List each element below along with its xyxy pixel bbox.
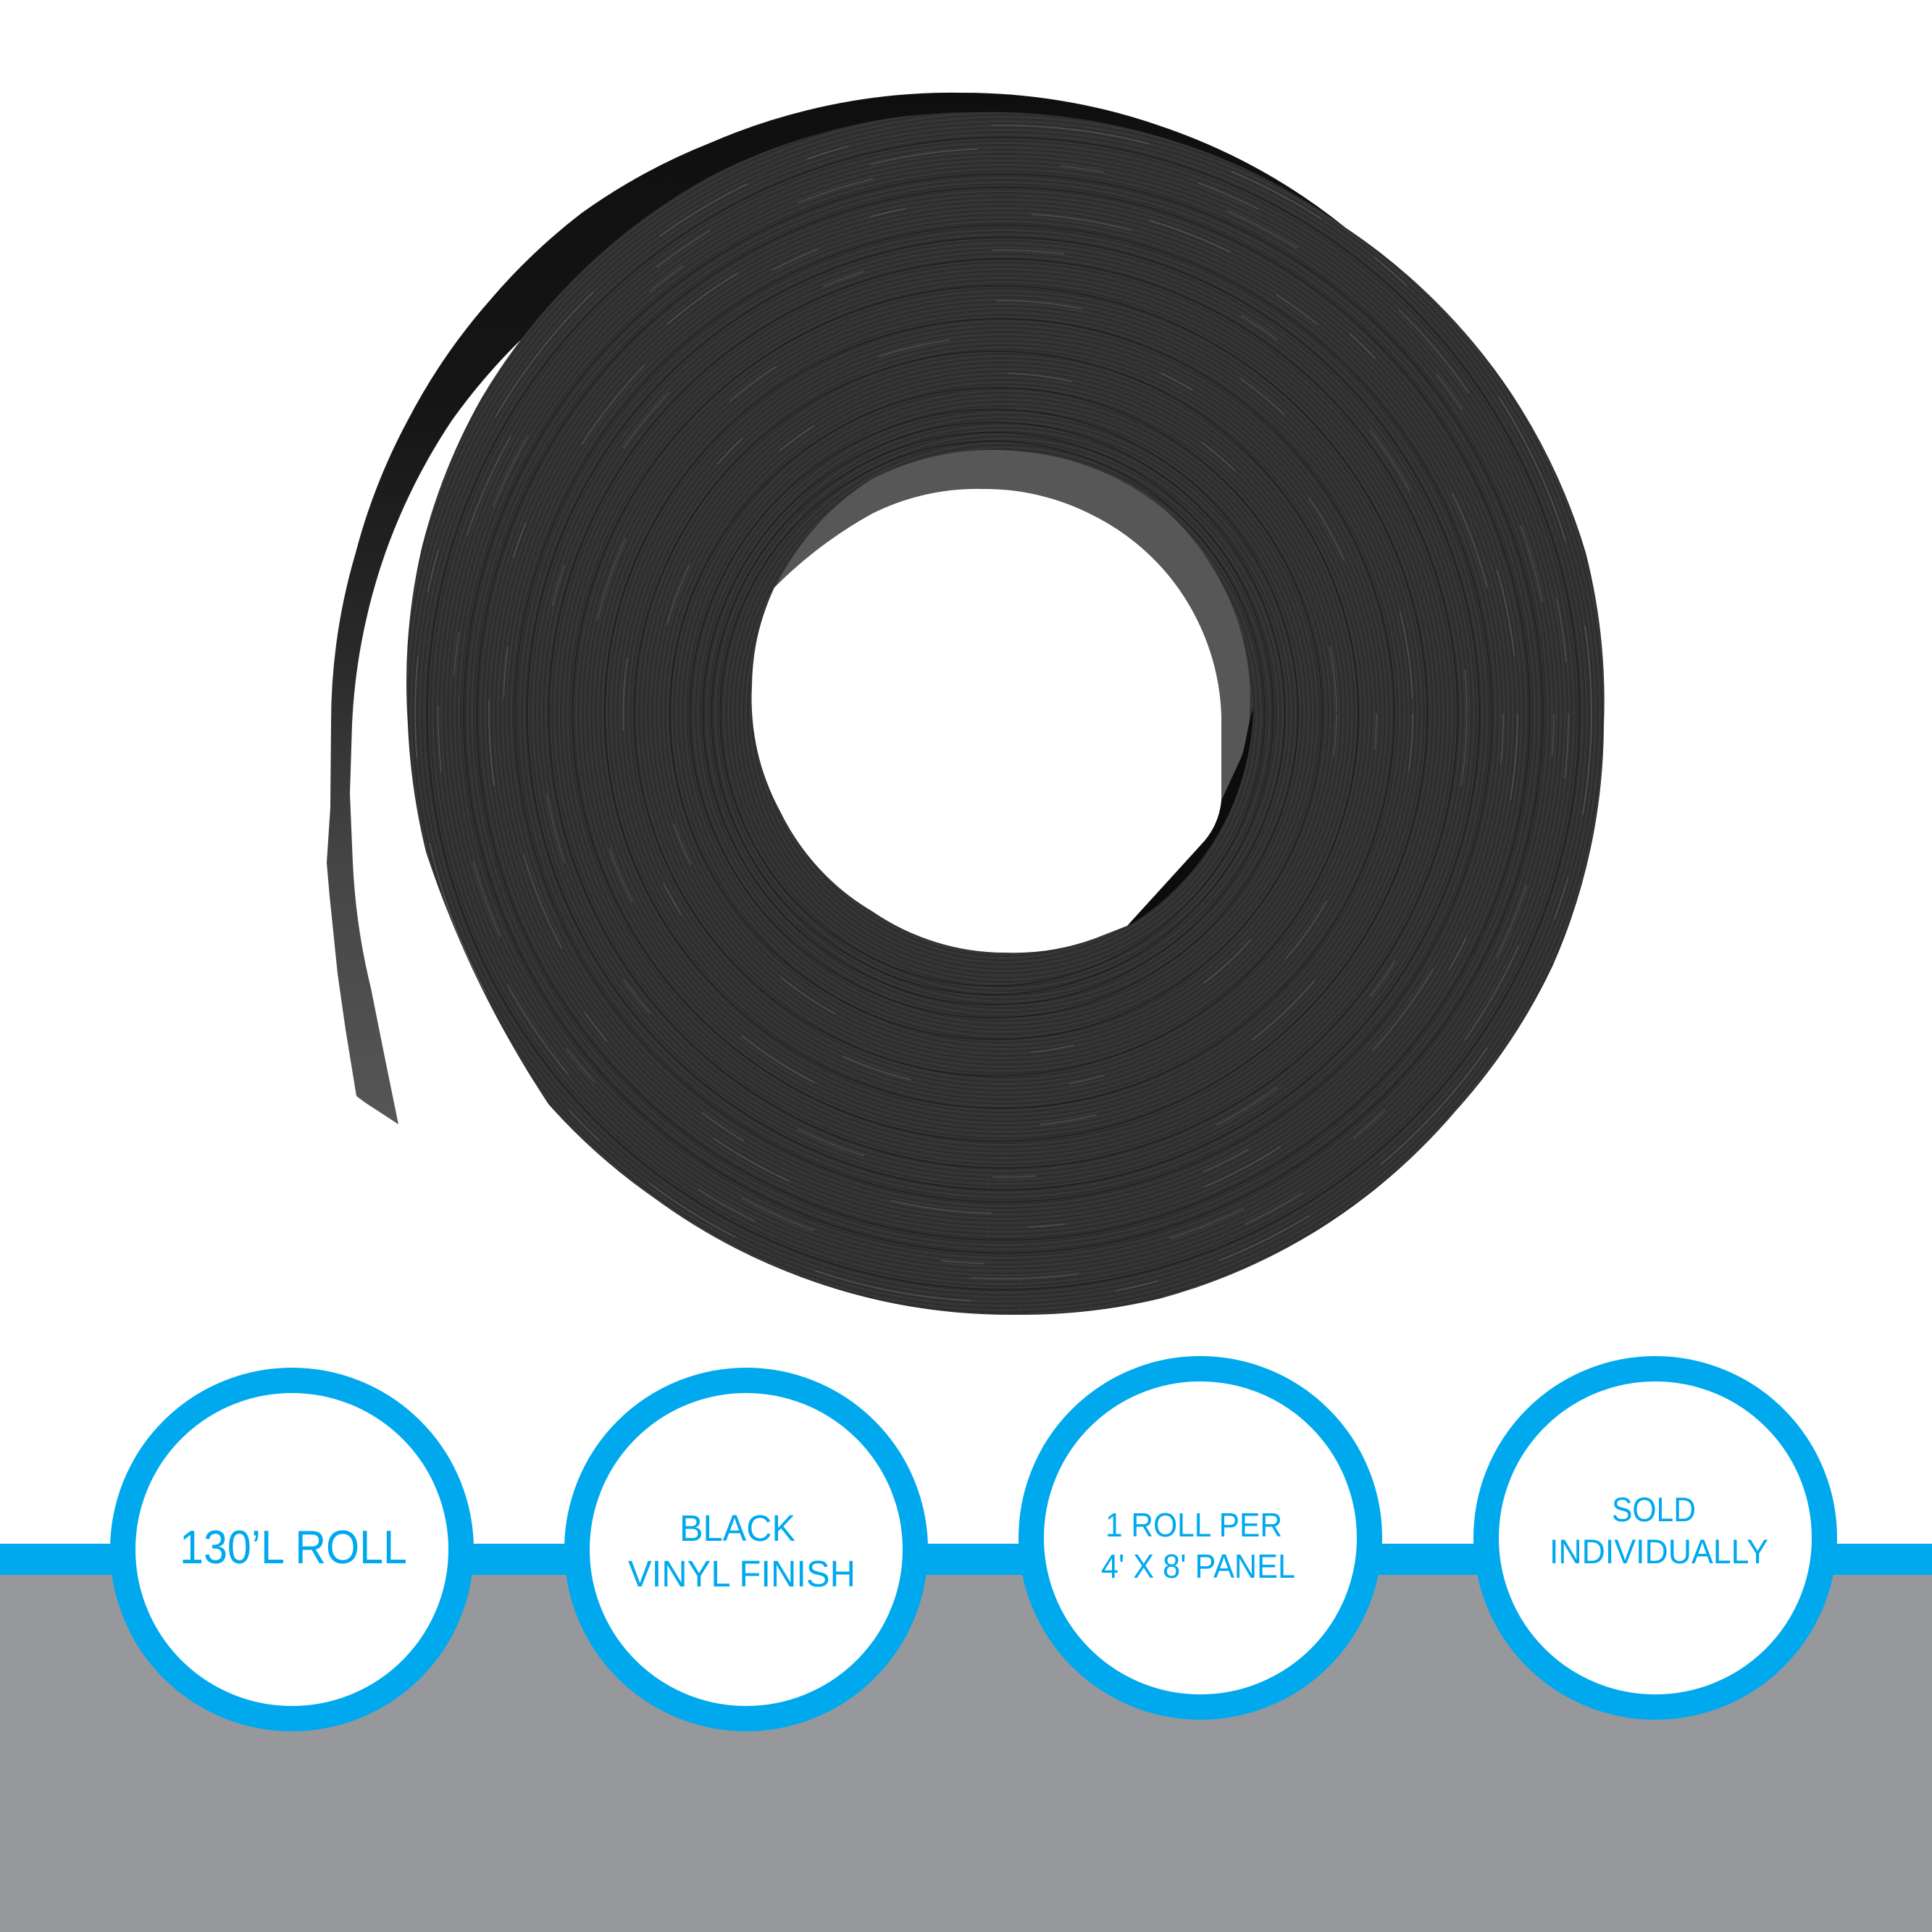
badge text: sold individually bbox=[1550, 1490, 1768, 1571]
badge text: 1 roll per 4' x 8' panel: 1 ROLL PER bbox=[1105, 1506, 1282, 1544]
badge text: black vinyl finish: BLACK bbox=[679, 1507, 795, 1549]
feature badge: 130'L roll bbox=[123, 1381, 461, 1718]
feature badge: 1 roll per 4' x 8' panel bbox=[1032, 1369, 1369, 1707]
badge text: 1 roll per 4' x 8' panel: 4' X 8' PANEL bbox=[1101, 1547, 1295, 1585]
loose strap end of the roll bbox=[327, 93, 1345, 1124]
badge text: black vinyl finish: VINYL FINISH bbox=[628, 1553, 856, 1594]
blue horizontal band bbox=[0, 1544, 1932, 1575]
feature badge: sold individually bbox=[1486, 1369, 1824, 1707]
feature badge: black vinyl finish bbox=[577, 1381, 916, 1718]
badge text: black vinyl finish bbox=[628, 1507, 856, 1594]
badge text: 1 roll per 4' x 8' panel bbox=[1101, 1506, 1295, 1585]
concentric winding lines bbox=[415, 125, 1592, 1302]
grey base panel bbox=[0, 1575, 1932, 1932]
badge text: sold individually: INDIVIDUALLY bbox=[1550, 1532, 1768, 1571]
inner core shadow sliver bbox=[1116, 708, 1253, 924]
badge text: sold individually: SOLD bbox=[1612, 1490, 1696, 1529]
badge text: 130'L ROLL: 130’L ROLL bbox=[180, 1521, 407, 1573]
inner core wall, grey bbox=[776, 450, 1250, 800]
centre hole of the roll bbox=[752, 489, 1221, 953]
product photo: black vinyl roll bbox=[327, 93, 1605, 1315]
wound roll body bbox=[406, 112, 1605, 1315]
